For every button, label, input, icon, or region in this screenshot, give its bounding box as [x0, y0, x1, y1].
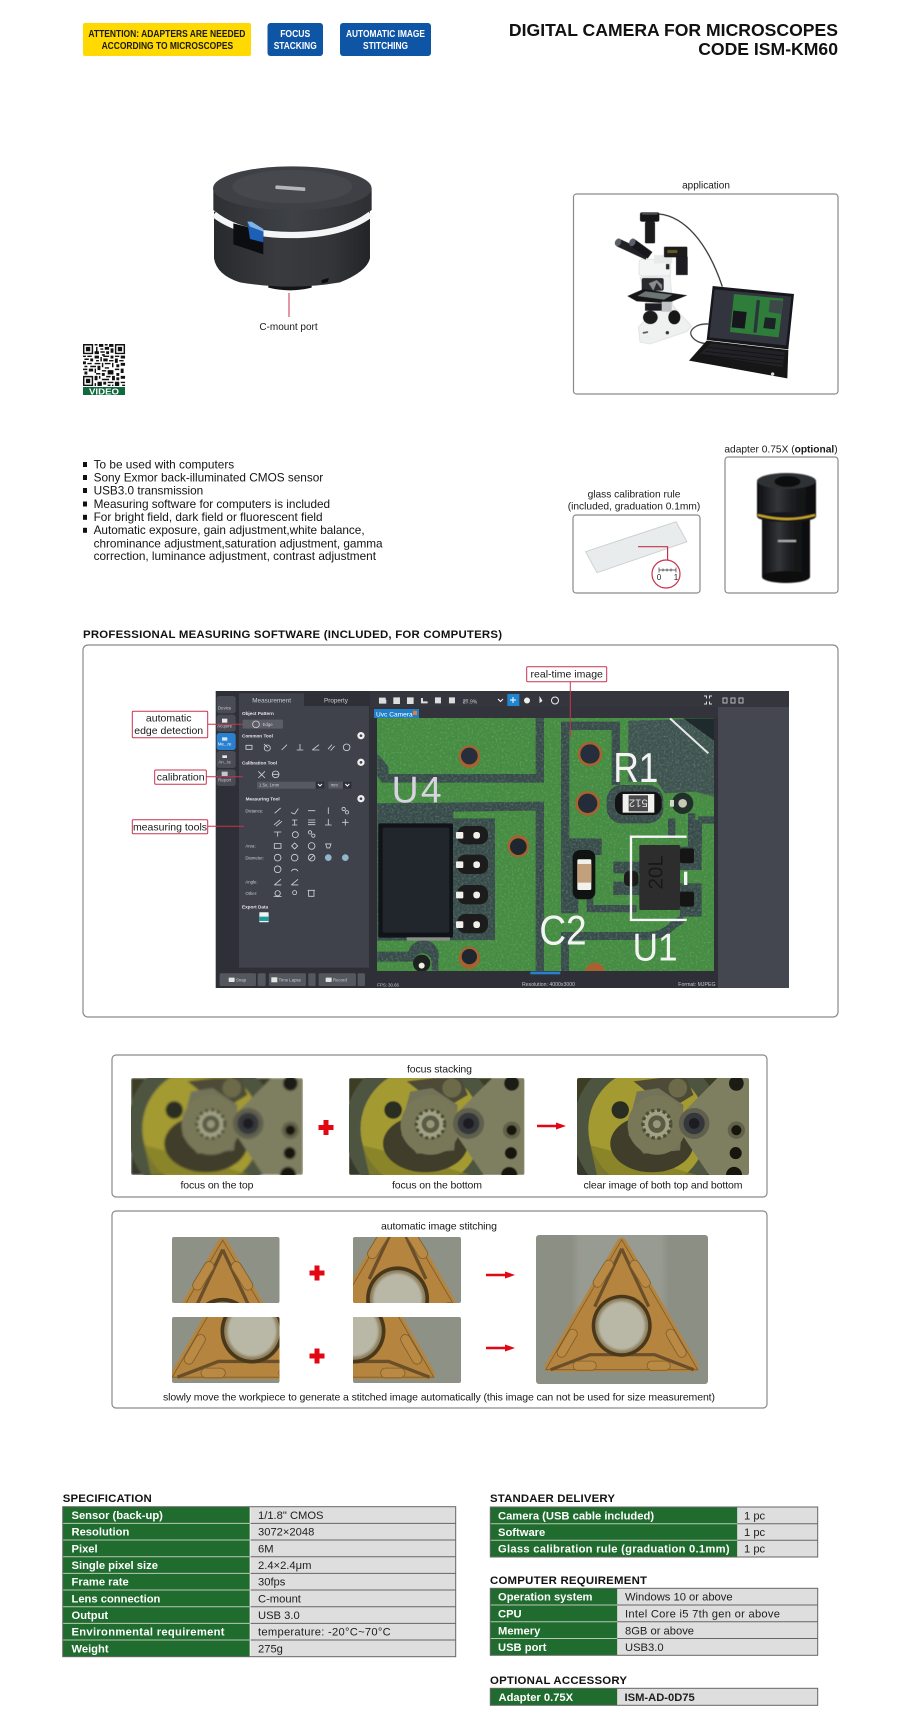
scale magnifier: 0: [657, 573, 662, 582]
requirement values: 8GB or above: [625, 1625, 694, 1637]
right components: R1: [613, 745, 658, 791]
spec values: 2.4×2.4μm: [258, 1560, 311, 1572]
left tool panel: Diameter:: [245, 855, 264, 860]
software heading: PROFESSIONAL MEASURING SOFTWARE (INCLUDED, FOR COMPUTERS): [83, 629, 502, 641]
standard delivery table: STANDAER DELIVERY: [490, 1493, 615, 1505]
panel: measuring software: [83, 645, 838, 1017]
adapter photo: [757, 473, 816, 583]
left tool panel: Other:: [245, 891, 257, 896]
spec values: temperature: -20°C~70°C: [258, 1627, 391, 1639]
spec labels: Single pixel size: [72, 1560, 158, 1572]
image tab and toolbar: 27.9%: [463, 700, 478, 706]
left part of pcb: [377, 713, 544, 973]
pcb live image: [377, 713, 714, 983]
requirement labels: Memery: [498, 1625, 541, 1637]
right components: C2: [539, 908, 587, 954]
left tool panel: Acquire: [217, 723, 233, 728]
captions: focus on the bottom: [392, 1180, 482, 1192]
delivery rows: Glass calibration rule (graduation 0.1mm): [498, 1544, 730, 1556]
optional accessory table: [490, 1675, 818, 1705]
computer requirement table: [490, 1575, 818, 1655]
callout: automatic edge detection: edge detection: [134, 725, 203, 737]
standard delivery table: [490, 1493, 818, 1557]
delivery quantities: 1 pc: [744, 1510, 766, 1522]
insert tile: lower right: [353, 1317, 461, 1383]
left tool panel: Me...re: [218, 741, 232, 746]
spec labels: Pixel: [72, 1543, 98, 1555]
spec values: [258, 1510, 391, 1655]
optional accessory table: ISM-AD-0D75: [624, 1692, 695, 1704]
scale magnifier: 1: [674, 573, 679, 582]
panel: adapter: [725, 457, 838, 593]
spec labels: Environmental requirement: [72, 1627, 225, 1639]
title: [509, 20, 838, 59]
image tab and toolbar: Format: MJPEG: [678, 982, 715, 988]
c-mount port callout: C-mount port: [259, 322, 318, 333]
feature list: To be used with computers: [94, 458, 234, 472]
camera photo: [213, 166, 372, 290]
spec labels: Lens connection: [72, 1593, 161, 1605]
left tool panel: Measuring Tool: [246, 797, 280, 802]
title: CODE ISM-KM60: [698, 39, 838, 59]
left tool panel: mm: [331, 783, 338, 788]
requirement values: Intel Core i5 7th gen or above: [625, 1608, 780, 1620]
spec values: USB 3.0: [258, 1610, 300, 1622]
badge: attention adapters: ATTENTION: ADAPTERS ARE NEEDED: [88, 29, 245, 40]
panel: glass calibration rule: [573, 515, 700, 593]
delivery quantities: [744, 1510, 766, 1556]
left components: [378, 747, 529, 972]
left tool panel: Area:: [245, 844, 256, 849]
glass calibration rule label: [568, 490, 700, 512]
requirement labels: USB port: [498, 1642, 547, 1654]
image tab and toolbar: [374, 694, 743, 988]
feature list: Measuring software for computers is included: [94, 497, 330, 511]
right part of pcb traces: [561, 718, 714, 973]
left tool panel: Edge: [263, 722, 273, 727]
left tool panel: Export Data: [242, 905, 269, 910]
left tool panel: Time Lapse: [279, 978, 302, 983]
feature list: Sony Exmor back-illuminated CMOS sensor: [94, 470, 323, 484]
left tool panel: FPS: 30.66: [377, 982, 400, 987]
delivery quantities: 1 pc: [744, 1527, 766, 1539]
left tool panel: An...te: [218, 759, 231, 764]
image tab and toolbar: Uvc Camera: [376, 711, 413, 718]
badge: attention adapters: [83, 23, 251, 56]
badge: attention adapters: ACCORDING TO MICROSCOPES: [102, 41, 233, 52]
glass calibration rule label: glass calibration rule: [588, 490, 681, 501]
specification table: SPECIFICATION: [63, 1493, 152, 1505]
requirement labels: [498, 1592, 593, 1654]
badge: automatic image stitching: [340, 23, 431, 56]
feature list: chrominance adjustment,saturation adjustment, gamma: [94, 536, 383, 550]
stitched result: [536, 1225, 708, 1384]
spec labels: Frame rate: [72, 1577, 129, 1589]
captions: clear image of both top and bottom: [584, 1180, 743, 1192]
arrow: [537, 1122, 566, 1130]
left tool panel: Device: [218, 705, 232, 710]
arrows: [486, 1272, 515, 1352]
callout: measuring tools: measuring tools: [133, 821, 207, 833]
requirement labels: CPU: [498, 1608, 522, 1620]
right components: 512: [629, 796, 648, 808]
callout: automatic edge detection: automatic: [146, 712, 191, 724]
left tool panel: Object Pattern: [242, 711, 274, 716]
delivery rows: [498, 1510, 730, 1556]
glass calibration rule label: (included, graduation 0.1mm): [568, 502, 700, 512]
panel: application photo: [574, 194, 838, 394]
video QR code: [83, 344, 125, 396]
captions: [180, 1180, 743, 1192]
heading: focus stacking: focus stacking: [407, 1064, 472, 1076]
plus: [318, 1120, 334, 1135]
captions: focus on the top: [180, 1180, 254, 1192]
spec values: 30fps: [258, 1577, 286, 1589]
delivery rows: Camera (USB cable included): [498, 1510, 654, 1522]
optional accessory table: Adapter 0.75X: [498, 1692, 574, 1704]
callout: real-time image: real-time image: [531, 669, 603, 681]
panel: automatic image stitching: [112, 1209, 767, 1408]
feature list: [83, 458, 383, 563]
callout: calibration: calibration: [157, 772, 205, 784]
requirement values: USB3.0: [625, 1642, 664, 1654]
right components: [459, 718, 714, 983]
gear image: combined: [577, 1078, 749, 1175]
spec labels: [72, 1510, 225, 1655]
plus signs: [310, 1266, 324, 1364]
application label: application: [682, 181, 730, 192]
badge: automatic image stitching: AUTOMATIC IMAGE: [346, 29, 425, 40]
glass slide: [586, 522, 687, 573]
insert tile: hole: [353, 1237, 461, 1303]
specification table: [63, 1493, 456, 1657]
heading: stitching: automatic image stitching: [381, 1220, 497, 1232]
pcb texture: [377, 718, 714, 971]
optional accessory table: OPTIONAL ACCESSORY: [490, 1675, 627, 1687]
adapter label: adapter 0.75X (optional): [724, 445, 838, 456]
left tool panel: Record: [333, 978, 348, 983]
spec values: 3072×2048: [258, 1527, 314, 1539]
badge: focus stacking: STACKING: [274, 41, 317, 52]
left tool panel: Calibration Tool: [242, 760, 277, 765]
spec values: 275g: [258, 1643, 283, 1655]
left tool panel: Measurement: [252, 698, 291, 705]
requirement labels: Operation system: [498, 1592, 593, 1604]
badge: focus stacking: [268, 23, 323, 56]
left tool panel: 1.5x, 1mm: [259, 783, 280, 788]
spec values: 6M: [258, 1543, 274, 1555]
insert tile: top: [172, 1237, 280, 1303]
requirement values: Windows 10 or above: [625, 1592, 733, 1604]
feature list: correction, luminance adjustment, contrast adjustment: [94, 549, 377, 563]
right components: U1: [633, 926, 678, 970]
left tool panel: Common Tool: [242, 734, 273, 739]
gear image: focus on bottom: [349, 1078, 524, 1175]
spec labels: Output: [72, 1610, 108, 1622]
feature list: USB3.0 transmission: [94, 484, 203, 498]
spec values: 1/1.8" CMOS: [258, 1510, 324, 1522]
callout: measuring tools: [132, 820, 244, 834]
microscope and laptop: [614, 212, 794, 378]
panel: focus stacking: [112, 1053, 767, 1204]
requirement values: [625, 1592, 780, 1654]
left tool panel: Report: [218, 778, 232, 783]
badge: automatic image stitching: STITCHING: [363, 41, 408, 52]
feature list: For bright field, dark field or fluorescent field: [94, 510, 323, 524]
spec labels: Resolution: [72, 1527, 129, 1539]
left tool panel: Angle:: [245, 879, 258, 884]
callout: real-time image: [527, 667, 607, 737]
badge: focus stacking: FOCUS: [280, 29, 310, 40]
computer requirement table: COMPUTER REQUIREMENT: [490, 1575, 647, 1587]
spec labels: Sensor (back-up): [72, 1510, 163, 1522]
c-mount port callout: [259, 293, 318, 333]
left tool panel: Property: [324, 698, 349, 705]
left components: U4: [392, 769, 442, 811]
delivery quantities: 1 pc: [744, 1544, 766, 1556]
callout: calibration: [155, 770, 243, 784]
title: DIGITAL CAMERA FOR MICROSCOPES: [509, 20, 838, 40]
left tool panel: 27.: [463, 699, 469, 704]
stitching caption: slowly move the workpiece to generate a stitched image automatically (this image can not be used for size measurement): [163, 1392, 715, 1404]
video QR code: VIDEO: [89, 387, 119, 396]
left tool panel: Snap: [236, 978, 247, 983]
spec values: C-mount: [258, 1593, 302, 1605]
scale magnifier: [638, 547, 680, 588]
feature list: Automatic exposure, gain adjustment,white balance,: [94, 523, 365, 537]
image tab and toolbar: Resolution: 4000x3000: [522, 982, 575, 988]
delivery rows: Software: [498, 1527, 545, 1539]
software window: [216, 691, 789, 988]
insert tile: lower left: [172, 1317, 280, 1383]
left tool panel: Distance:: [245, 808, 263, 813]
callout: automatic edge detection: [132, 711, 243, 738]
left tool panel: [217, 693, 469, 987]
spec labels: Weight: [72, 1643, 109, 1655]
right components: 20L: [645, 855, 668, 890]
gear image: focus on top: [131, 1078, 303, 1175]
